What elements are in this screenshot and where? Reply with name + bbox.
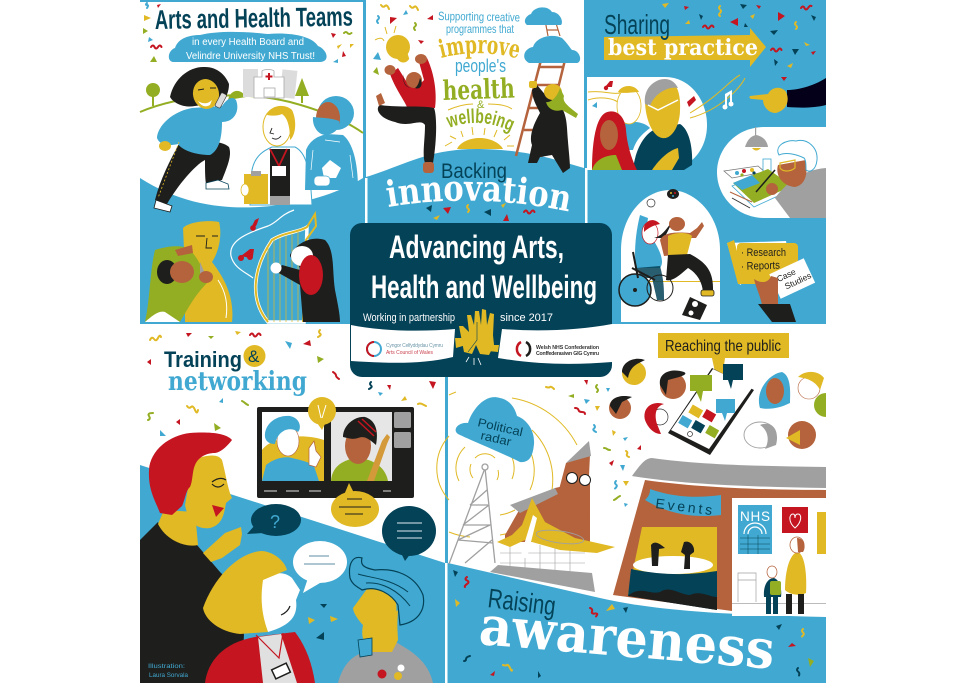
person with blonde hair <box>203 551 315 683</box>
reaching the public sign: Reaching the public <box>665 338 781 355</box>
dancer in red <box>376 54 436 173</box>
icon: hospital <box>243 69 297 99</box>
older woman painting <box>756 140 826 218</box>
central title panel: since 2017 <box>500 312 553 324</box>
logo banner: welsh nhs confederation: Welsh NHS Confederation <box>536 345 599 351</box>
logo banner: welsh nhs confederation: Conffederasiwn GIG Cymru <box>536 351 599 357</box>
headline: improve health and wellbeing: health <box>442 73 515 107</box>
man climbing ladder <box>528 81 578 173</box>
icon: lightbulb <box>375 26 410 64</box>
confetti <box>143 3 816 678</box>
heading: training and networking: & <box>248 347 260 366</box>
headline: improve health and wellbeing <box>438 9 520 134</box>
arrow banner: best practice: best practice <box>608 35 758 61</box>
events building <box>613 458 826 616</box>
hill and trees <box>140 78 363 133</box>
NHS poster <box>738 505 772 554</box>
man in blue <box>617 86 650 150</box>
folder with research: · Reports <box>741 260 780 273</box>
speech bubble: dark with lines <box>382 506 436 561</box>
speech bubble: yellow <box>331 483 379 527</box>
heart poster <box>782 507 808 533</box>
panel: training and networking <box>140 324 448 683</box>
folder with research: · Research <box>741 247 786 259</box>
headline: improve health and wellbeing: Supporting creative <box>438 9 520 24</box>
credit: Laura Sorvala <box>149 672 188 679</box>
woman on phone <box>154 67 237 212</box>
main title <box>371 229 597 305</box>
smartphone with social icons <box>668 364 754 455</box>
video: nurse <box>262 412 324 481</box>
icon: political radar cloud: Political <box>476 415 524 439</box>
clouds <box>524 7 580 63</box>
heading: training and networking <box>164 345 307 397</box>
heading: sharing: Sharing <box>604 9 670 40</box>
ladder <box>516 20 565 157</box>
music note white <box>722 90 734 110</box>
heading: backing innovation: Backing <box>441 160 507 183</box>
harpist <box>270 239 340 322</box>
banner: events: Events <box>655 495 713 518</box>
palette <box>724 166 765 178</box>
cloud with caption: in every Health Board and <box>192 37 304 48</box>
tagline: Working in partnership <box>363 312 455 324</box>
person with red hair <box>140 433 244 683</box>
panel: backing innovation <box>365 0 588 223</box>
panel: arts and health teams <box>140 2 363 212</box>
speaker <box>682 297 707 320</box>
radar arcs <box>437 392 577 537</box>
banner: events <box>645 489 721 518</box>
logo banner: arts council of wales: Cyngor Celfyddydau Cymru <box>386 343 443 349</box>
central title panel <box>350 223 612 377</box>
nurse in scrubs <box>305 96 358 190</box>
logo banner: arts council of wales: Arts Council of Wales <box>386 350 434 356</box>
faces around phone <box>609 359 826 449</box>
headline: improve health and wellbeing: programmes that <box>446 22 514 36</box>
doctor with clipboard <box>241 106 312 205</box>
painting vignette <box>717 127 826 218</box>
speech bubble: question <box>247 504 301 536</box>
woman with red hair <box>592 111 637 170</box>
credit <box>148 663 188 679</box>
parliament building with clock tower <box>490 441 615 592</box>
person with blue hair <box>338 557 433 683</box>
folder with research <box>727 240 815 322</box>
white swirl <box>231 210 294 278</box>
singing group vignette <box>587 75 745 170</box>
headline: improve health and wellbeing: improve <box>438 38 520 59</box>
arrow banner: best practice <box>604 28 766 67</box>
wheelchair user <box>619 199 673 306</box>
main title: Advancing Arts, <box>389 229 564 265</box>
panel: sharing best practice <box>587 9 826 322</box>
credit: Illustration: <box>148 663 185 670</box>
visitors <box>764 537 806 614</box>
brushes <box>730 192 752 202</box>
note: case studies: Case <box>775 266 798 284</box>
radio tower <box>449 464 495 564</box>
headline: improve health and wellbeing: people's <box>455 56 506 76</box>
disco light <box>667 189 679 199</box>
sun <box>445 127 514 149</box>
speech bubble: white <box>293 541 347 593</box>
music notes <box>238 218 259 261</box>
dancing vignette <box>619 189 720 322</box>
lamp <box>745 127 768 150</box>
hand and sleeve <box>754 276 778 305</box>
cloud with caption: Velindre University NHS Trust! <box>186 51 315 62</box>
heading: raising awareness: awareness <box>477 593 777 682</box>
icon: political radar cloud: radar <box>479 428 513 449</box>
main title: Health and Wellbeing <box>371 269 597 305</box>
heading: backing innovation: innovation <box>386 176 569 212</box>
speech bubble: question: ? <box>270 512 280 532</box>
headline: improve health and wellbeing: & <box>477 99 485 111</box>
glass <box>763 159 771 171</box>
note: case studies <box>769 258 815 299</box>
note: case studies: Studies <box>783 270 813 291</box>
stage <box>628 527 717 610</box>
reaching the public sign <box>658 333 789 396</box>
high five hands <box>455 309 499 365</box>
logo banner: welsh nhs confederation <box>498 324 612 364</box>
heading: training and networking: networking <box>168 367 307 397</box>
dancer in yellow <box>654 217 714 296</box>
side tiles <box>394 412 411 428</box>
headline: improve health and wellbeing: wellbeing <box>446 108 514 134</box>
heading: raising awareness: Raising <box>486 583 557 621</box>
notes <box>605 81 613 87</box>
old man singing <box>633 79 692 170</box>
cloud with caption <box>169 32 327 62</box>
icon: political radar cloud <box>456 397 534 462</box>
panel: musicians in blue area <box>145 210 340 322</box>
heading: backing innovation <box>386 160 569 212</box>
icon: bulb <box>308 397 336 430</box>
video call screen <box>257 397 414 498</box>
logo banner: arts council of wales <box>351 325 455 363</box>
harp <box>256 214 316 322</box>
video: musician <box>331 412 392 481</box>
heading: arts and health teams: Arts and Health Teams <box>155 2 353 35</box>
pointing hand and sleeve <box>749 78 826 113</box>
NHS poster: NHS <box>740 509 770 524</box>
yellow figure <box>183 221 232 322</box>
heading: training and networking: Training <box>164 347 242 372</box>
yellow poster <box>817 512 826 554</box>
green hugging woman <box>145 245 213 322</box>
sketchbook <box>732 169 793 207</box>
display stand <box>738 573 756 602</box>
panel: raising awareness <box>437 324 826 682</box>
